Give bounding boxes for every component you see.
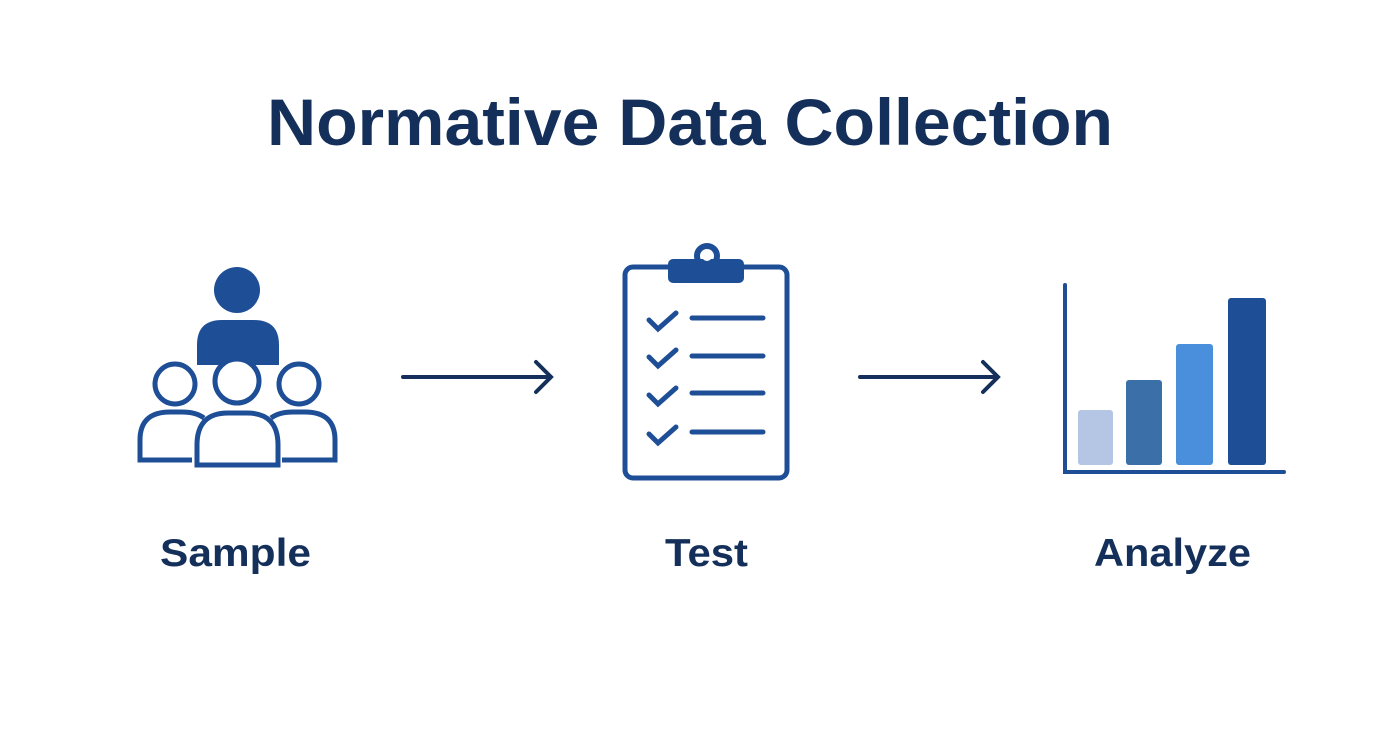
icon: bar chart bbox=[1065, 285, 1284, 472]
icon: clipboard checklist bbox=[625, 246, 787, 478]
label: Sample: Sample bbox=[160, 532, 311, 575]
arrow 2 bbox=[860, 362, 998, 392]
arrow 1 bbox=[403, 362, 551, 392]
label: Test: Test bbox=[665, 532, 748, 575]
label: Analyze: Analyze bbox=[1094, 532, 1251, 575]
icon: people group bbox=[140, 267, 335, 465]
title: Normative Data Collection bbox=[267, 85, 1113, 159]
